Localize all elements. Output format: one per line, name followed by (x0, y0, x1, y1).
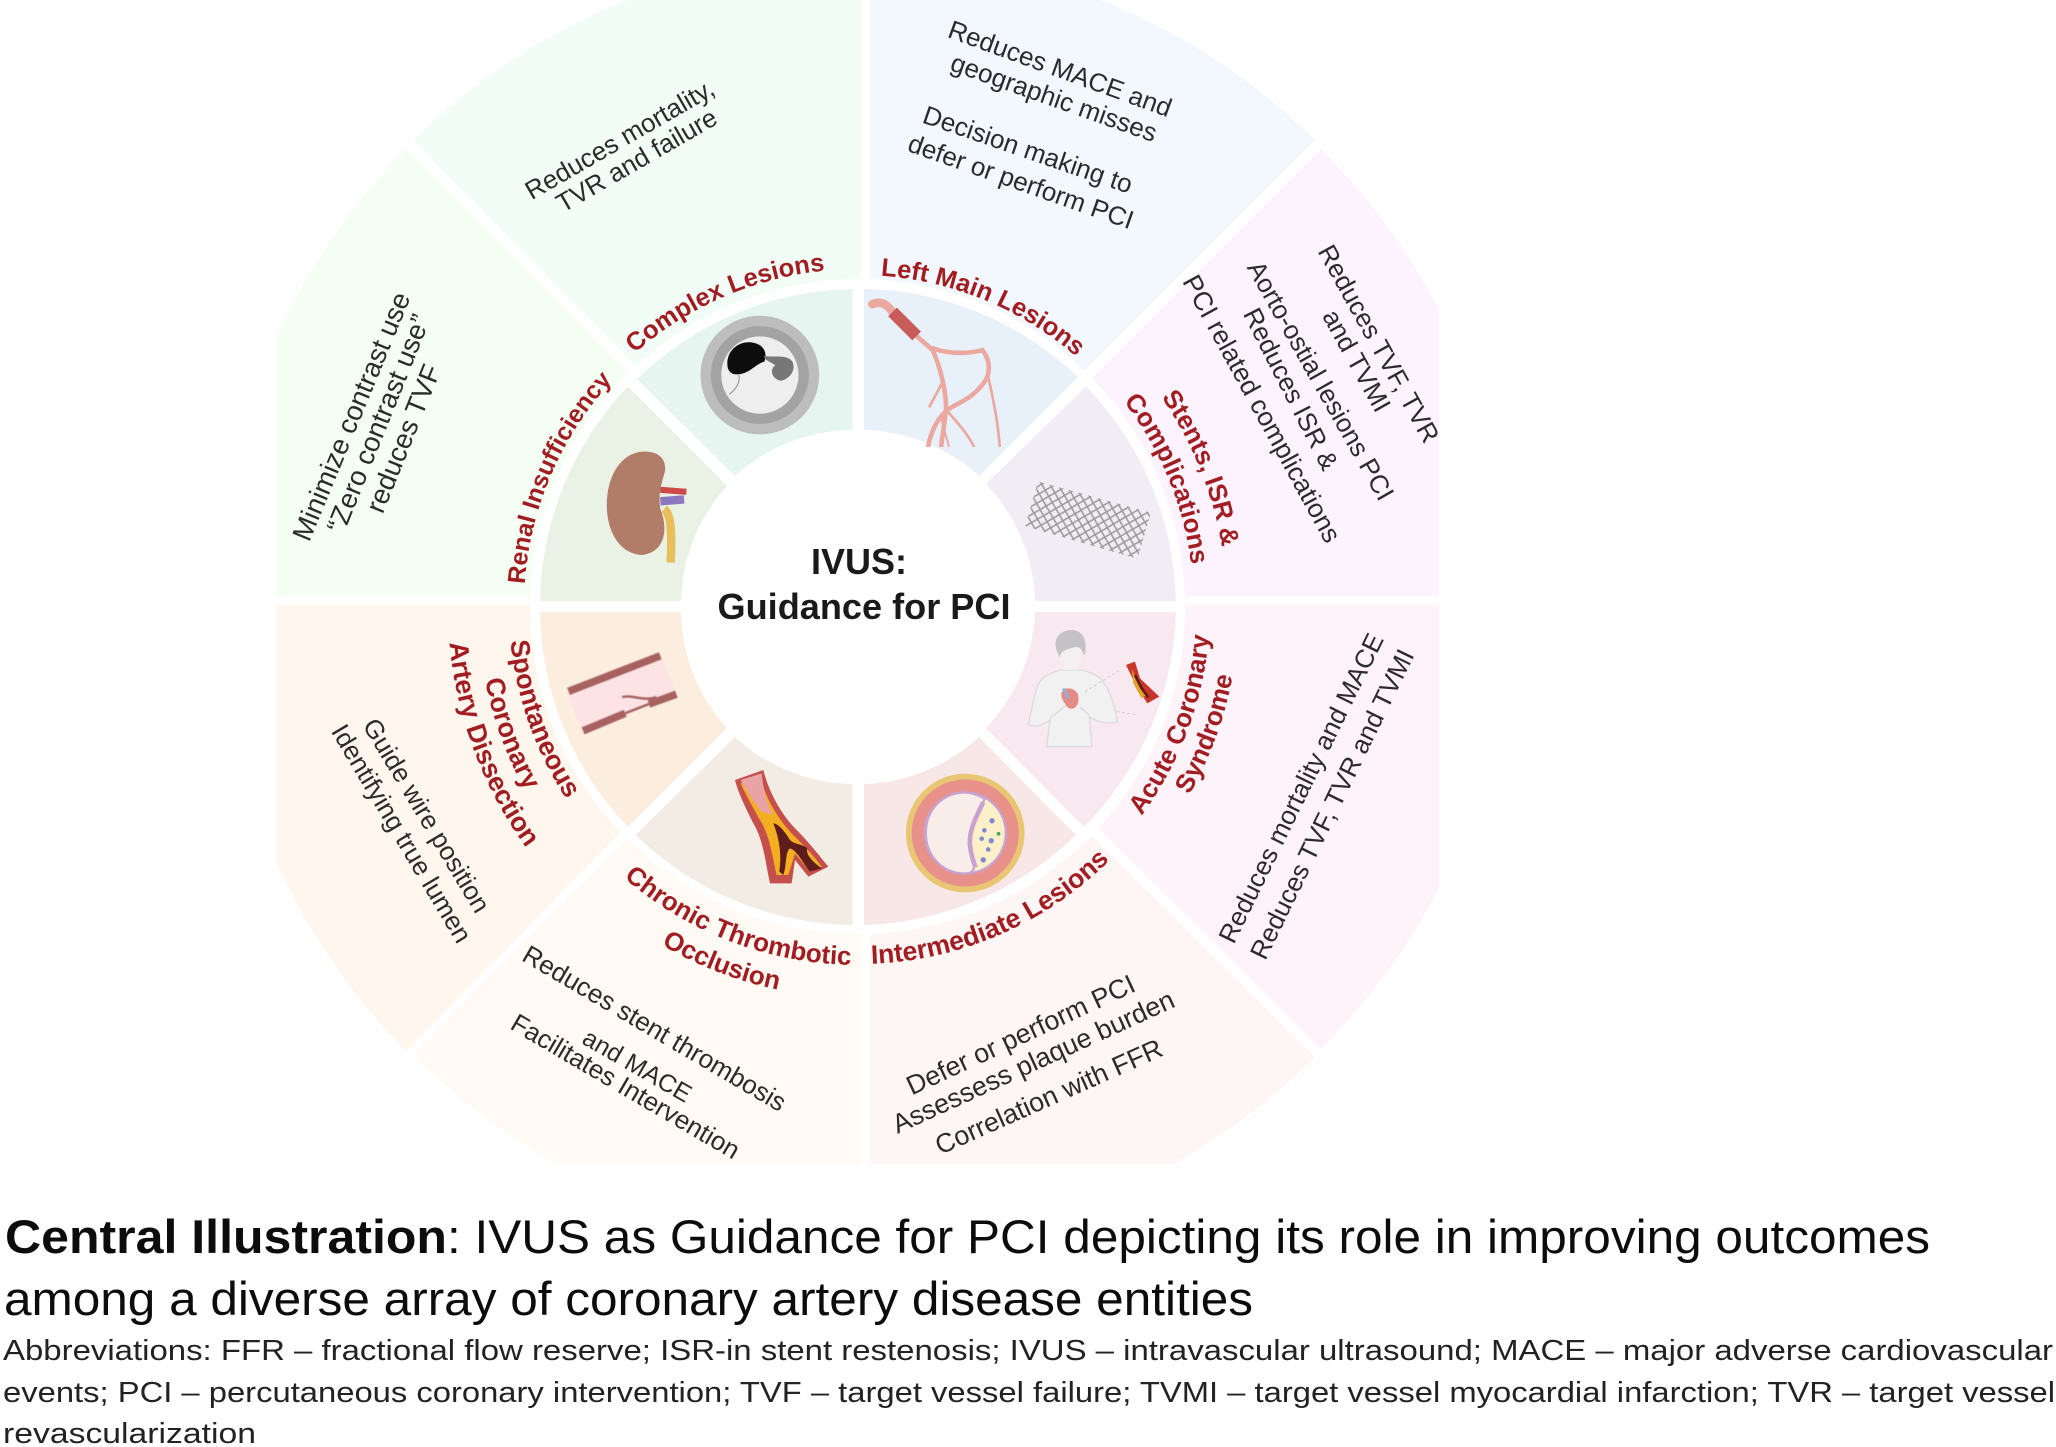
text: chronic thrombotic occlusion outcomes: Reduces stent thrombosis (517, 939, 792, 1117)
abbreviations note: Abbreviations: FFR – fractional flow reserve; ISR-in stent restenosis; IVUS – intravascular ultrasound; MACE – major adverse cardiovascular (3, 1335, 2053, 1367)
caption heading: Central Illustration (5, 1210, 447, 1263)
outer sector: stents (1092, 150, 1439, 596)
caption heading: among a diverse array of coronary artery disease entities (4, 1272, 1253, 1325)
text: renal insufficiency outcomes: “Zero contrast use” (320, 310, 436, 537)
inner sector: chronic thrombotic occlusion (636, 737, 852, 925)
icon: kidney (607, 452, 686, 563)
panel: chronic thrombotic occlusion (414, 737, 861, 1165)
text: renal insufficiency outcomes: reduces TVF (359, 360, 447, 517)
text: intermediate lesions outcomes: Defer or perform PCI (902, 969, 1140, 1101)
panel: left main lesions (864, 0, 1314, 476)
label: Spontaneous Coronary Artery Dissection: Coronary (486, 678, 538, 786)
label: Renal Insufficiency: Renal Insufficiency (508, 372, 611, 583)
label: Left Main Lesions: Left Main Lesions (882, 258, 1082, 354)
panel: intermediate lesions (864, 737, 1314, 1164)
text: left main outcomes: Decision making to (919, 100, 1137, 199)
icon: dissected vessel (567, 655, 678, 732)
panel: renal insufficiency (276, 150, 727, 601)
center title (718, 541, 1010, 627)
text: stents outcomes: Aorto-ostial lesions PCI (1241, 256, 1400, 506)
outer sector: renal insufficiency (276, 150, 628, 596)
text: acute coronary syndrome outcomes: Reduces TVF, TVR and TVMI (1244, 644, 1420, 964)
inner sector: renal insufficiency (540, 386, 727, 601)
label: Complex Lesions: Complex Lesions (627, 258, 824, 350)
inner sector: acute coronary syndrome (986, 612, 1176, 827)
panel: stents, ISR and complications (986, 150, 1446, 601)
icon: coronary arteries (872, 303, 1000, 447)
icon: patient with chest pain and artery (1028, 630, 1159, 747)
text: stents outcomes: and TVMI (1317, 304, 1397, 417)
label: Acute Coronary Syndrome: Syndrome (1176, 675, 1232, 792)
text: stents outcomes: PCI related complications (1177, 270, 1347, 548)
outer sector: acute coronary syndrome (1099, 604, 1439, 1048)
abbreviations note: events; PCI – percutaneous coronary intervention; TVF – target vessel failure; TVMI – target vessel myocardial infarction; TVR – target vessel (3, 1377, 2055, 1409)
label: Chronic Thrombotic Occlusion: Occlusion (665, 932, 779, 990)
outer sector: chronic thrombotic occlusion (414, 839, 861, 1164)
inner sector: stents (986, 386, 1176, 601)
outer sector: complex lesions (414, 0, 861, 366)
text: renal insufficiency outcomes: Minimize contrast use (286, 288, 416, 545)
text: intermediate lesions outcomes: Assessess plaque burden (887, 984, 1179, 1139)
inner sector: SCAD (540, 612, 727, 827)
outer sector: intermediate lesions (870, 836, 1314, 1164)
text: left main outcomes: defer or perform PCI (904, 128, 1138, 235)
label: Stents, ISR & Complications: Complications (1127, 394, 1204, 564)
text: SCAD outcomes: Identifying true lumen (325, 719, 478, 948)
text: chronic thrombotic occlusion outcomes: and MACE (578, 1024, 696, 1108)
panel: spontaneous coronary artery dissection (276, 604, 727, 1050)
icon: vessel cross-section with plaque (906, 774, 1025, 892)
caption heading (4, 1210, 1930, 1325)
label: Acute Coronary Syndrome: Acute Coronary (1131, 634, 1214, 816)
outer sector: left main lesions (870, 0, 1315, 370)
text: chronic thrombotic occlusion outcomes: Facilitates Intervention (506, 1007, 745, 1165)
icon: IVUS cross-section (701, 316, 819, 434)
inner sector: intermediate lesions (864, 737, 1076, 925)
text: acute coronary syndrome outcomes: Reduces mortality and MACE (1212, 628, 1390, 948)
label: Spontaneous Coronary Artery Dissection: Spontaneous (508, 640, 576, 797)
center title: Guidance for PCI (718, 586, 1010, 627)
text: stents outcomes (1177, 239, 1446, 548)
icon: stent mesh (1026, 482, 1150, 559)
text: left main outcomes: geographic misses (947, 47, 1161, 148)
text: complex lesions outcomes: Reduces mortality, (520, 73, 719, 206)
outer sector: SCAD (276, 604, 620, 1050)
panel: complex lesions (414, 0, 861, 476)
text: stents outcomes: Reduces TVF, TVR (1312, 239, 1446, 448)
text: SCAD outcomes: Guide wire position (357, 713, 497, 918)
center title: IVUS: (811, 541, 907, 582)
label: Intermediate Lesions: Intermediate Lesions (872, 852, 1108, 964)
text: left main outcomes (904, 14, 1176, 235)
text: complex lesions outcomes: TVR and failure (551, 102, 722, 218)
inner sector: left main lesions (864, 289, 1078, 476)
label: Stents, ISR & Complications: Stents, ISR & (1164, 390, 1238, 546)
abbreviations note (3, 1335, 2055, 1447)
caption heading: : IVUS as Guidance for PCI depicting its role in improving outcomes (447, 1210, 1930, 1263)
text: left main outcomes: Reduces MACE and (944, 14, 1176, 123)
text: stents outcomes: Reduces ISR & (1237, 303, 1345, 475)
wheel: IVUS guidance (276, 0, 1446, 1165)
label: Spontaneous Coronary Artery Dissection: Artery Dissection (450, 643, 536, 847)
inner sector: complex lesions (637, 289, 852, 476)
label: Chronic Thrombotic Occlusion: Chronic Thrombotic (628, 868, 850, 965)
icon: occluded artery (735, 770, 828, 883)
panel: acute coronary syndrome (986, 604, 1439, 1048)
text: intermediate lesions outcomes: Correlation with FFR (931, 1033, 1167, 1160)
